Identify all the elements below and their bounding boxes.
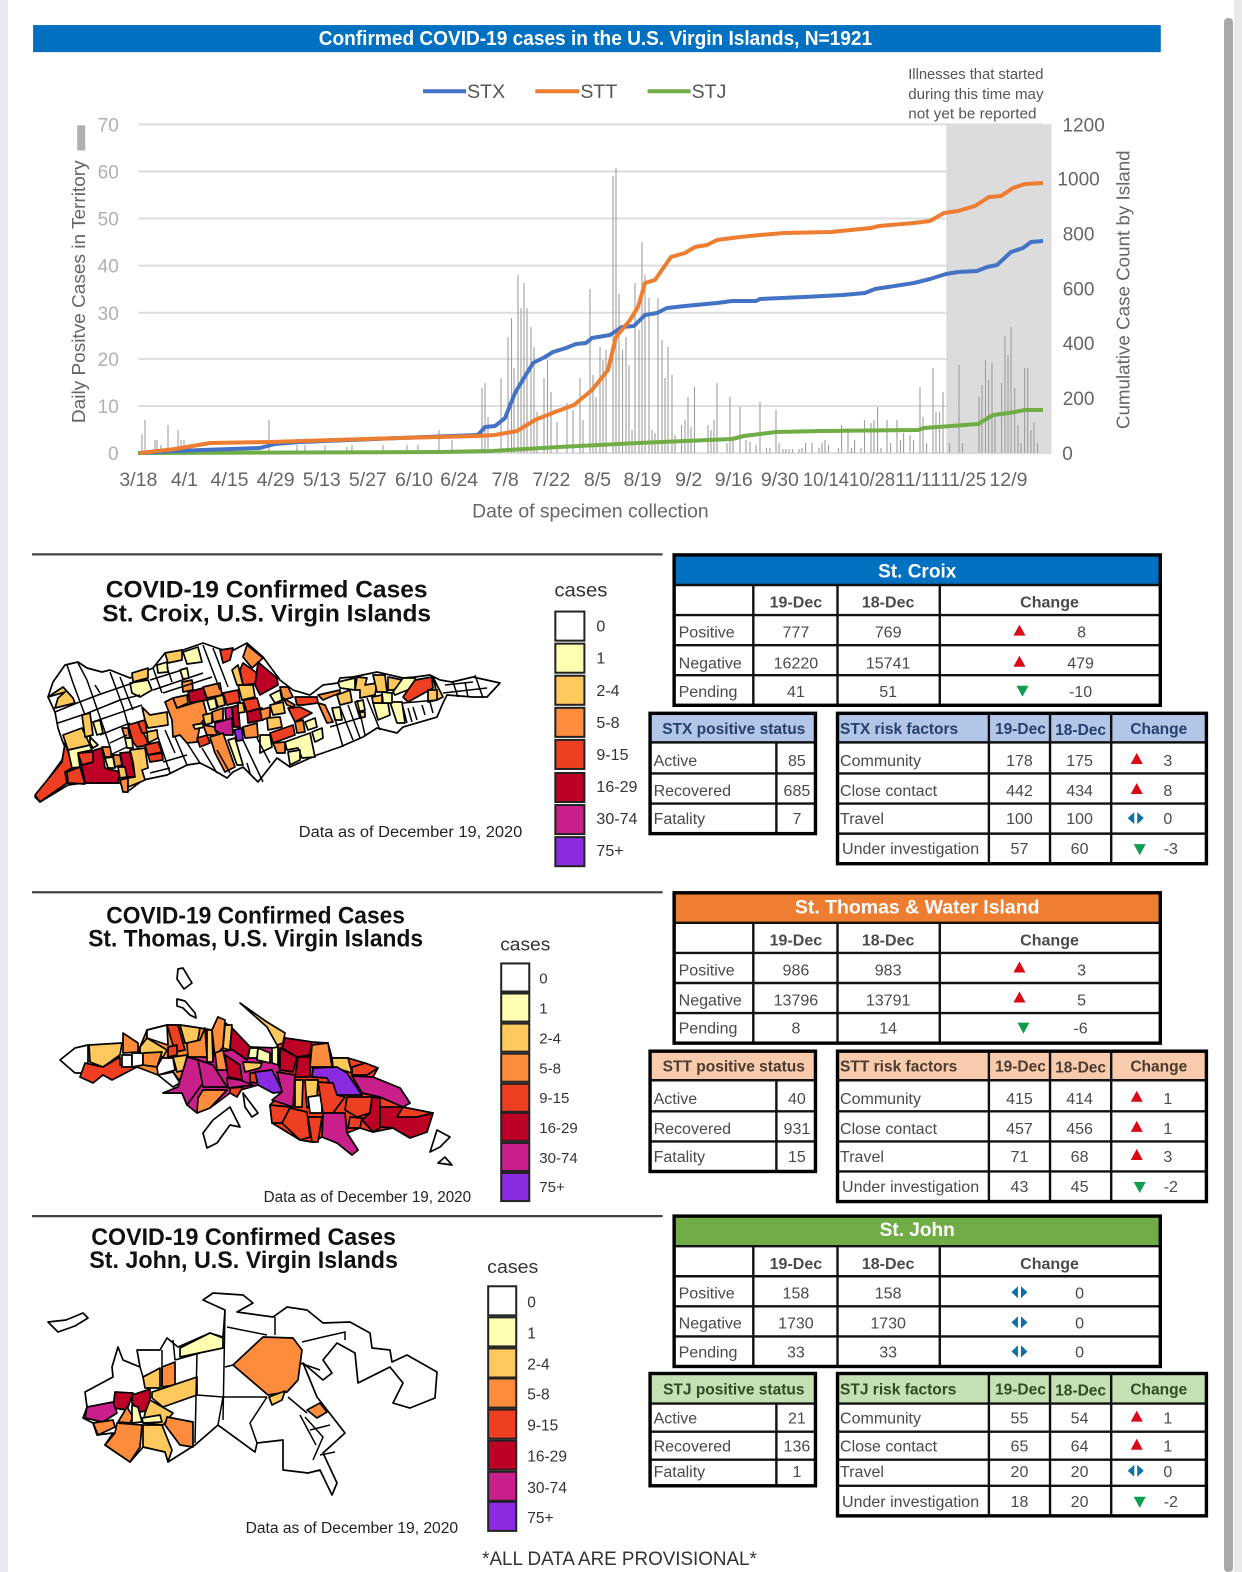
panel: St. John map bbox=[48, 1224, 567, 1537]
left axis labels bbox=[98, 115, 119, 465]
table: STJ risk factors: 65 bbox=[1011, 1438, 1028, 1456]
table: STJ positive status: 1 bbox=[792, 1463, 801, 1481]
legend: St. Thomas case bins: 0 bbox=[539, 971, 548, 988]
heading: St. John map title: St. John, U.S. Virgin Islands bbox=[89, 1247, 398, 1274]
table: STT risk factors: 19-Dec bbox=[995, 1059, 1046, 1076]
table: STT risk factors: STT risk factors bbox=[840, 1059, 957, 1076]
date axis labels: 4/15 bbox=[211, 469, 249, 491]
daily case bars bbox=[142, 168, 1038, 453]
date axis labels: 11/11 bbox=[895, 469, 941, 491]
table: STX risk factors: 100 bbox=[1066, 810, 1093, 828]
right axis labels bbox=[1057, 115, 1105, 465]
right axis labels: 800 bbox=[1063, 225, 1094, 246]
table: STX risk factors: 178 bbox=[1006, 752, 1033, 770]
legend: St. Croix case bins: cases bbox=[554, 581, 607, 602]
table: St. John summary: 158 bbox=[875, 1284, 902, 1302]
table: STT risk factors: 1 bbox=[1163, 1090, 1172, 1108]
table: St. John summary: 33 bbox=[787, 1343, 805, 1361]
table: St. Croix summary: 769 bbox=[875, 624, 902, 642]
table: St. John summary: 0 bbox=[1075, 1343, 1084, 1361]
table: STT risk factors: Under investigation bbox=[842, 1178, 979, 1196]
right axis title: Cumulative Case Count by Island bbox=[1114, 150, 1134, 429]
table: STT risk factors: 43 bbox=[1011, 1178, 1028, 1196]
table: STX risk factors: 19-Dec bbox=[995, 721, 1046, 738]
table: STJ positive status: 136 bbox=[784, 1438, 810, 1456]
legend: St. Croix case bins: 0 bbox=[596, 618, 605, 636]
table: STX positive status: 85 bbox=[788, 752, 806, 770]
table: STX risk factors: Travel bbox=[840, 810, 884, 828]
table: STT positive status: Active bbox=[654, 1090, 697, 1108]
choropleth map: St. John bbox=[48, 1293, 437, 1495]
legend: St. John case bins: 5-8 bbox=[527, 1387, 550, 1404]
table: STT risk factors: -2 bbox=[1164, 1178, 1178, 1196]
heading: St. Thomas map title bbox=[88, 902, 423, 952]
legend: islands: STX bbox=[467, 81, 505, 103]
table: St. Thomas & Water Island summary: 8 bbox=[791, 1020, 800, 1038]
table: St. Croix summary: 15741 bbox=[866, 655, 910, 673]
left axis title: Daily Positve Cases in Territory bbox=[69, 160, 89, 423]
table: St. Croix summary: Positive bbox=[679, 624, 735, 642]
table: STX risk factors: 442 bbox=[1006, 782, 1033, 800]
chart shaded reporting-lag region bbox=[946, 124, 1052, 454]
table: STJ positive status: STJ positive status bbox=[663, 1382, 804, 1399]
left axis labels: 0 bbox=[108, 444, 119, 465]
left axis labels: 30 bbox=[98, 304, 119, 325]
table: STT positive status: Recovered bbox=[654, 1120, 731, 1138]
table: St. Thomas & Water Island summary: 986 bbox=[783, 961, 809, 979]
table: STT risk factors: 415 bbox=[1006, 1090, 1033, 1108]
date axis labels: 9/16 bbox=[715, 469, 753, 491]
table: St. Thomas & Water Island summary: 19-Dec bbox=[770, 931, 822, 949]
table: St. Thomas & Water Island summary: 3 bbox=[1077, 961, 1086, 979]
date axis labels: 6/24 bbox=[440, 469, 478, 491]
table: STT risk factors: Close contact bbox=[840, 1120, 938, 1138]
choropleth map: St. Thomas bbox=[60, 968, 452, 1165]
date axis labels: 11/25 bbox=[940, 469, 987, 491]
table: St. John summary: 1730 bbox=[778, 1314, 814, 1332]
left axis labels: 50 bbox=[98, 210, 119, 231]
right axis labels: 400 bbox=[1063, 334, 1094, 355]
table: STJ risk factors: 18 bbox=[1011, 1493, 1028, 1511]
table: St. Thomas & Water Island summary: St. Thomas & Water Island bbox=[795, 897, 1040, 918]
legend: St. Thomas case bins: 9-15 bbox=[539, 1090, 569, 1107]
legend: St. Croix case bins: 75+ bbox=[596, 842, 624, 860]
table: STX positive status: 685 bbox=[784, 782, 810, 800]
map parcel boundaries bbox=[55, 645, 487, 782]
table: STX risk factors: STX risk factors bbox=[840, 721, 958, 738]
table: STJ risk factors: STJ risk factors bbox=[840, 1382, 956, 1399]
heading: St. Croix map title: St. Croix, U.S. Virgin Islands bbox=[102, 601, 431, 628]
table: STJ risk factors: 0 bbox=[1163, 1463, 1172, 1481]
map parcel boundaries bbox=[140, 1310, 345, 1460]
table: STX risk factors: Under investigation bbox=[842, 840, 979, 858]
table: St. John summary: 18-Dec bbox=[862, 1255, 914, 1273]
date axis labels bbox=[119, 469, 1027, 491]
table: St. Thomas & Water Island summary: 18-Dec bbox=[862, 931, 914, 949]
table: STT risk factors: 68 bbox=[1071, 1148, 1089, 1166]
table: St. Croix summary bbox=[674, 555, 1160, 705]
table: STT risk factors: 71 bbox=[1011, 1148, 1028, 1166]
table: STX risk factors: 100 bbox=[1006, 810, 1033, 828]
table: St. Croix summary: 18-Dec bbox=[862, 594, 914, 612]
table: St. Thomas & Water Island summary: Pending bbox=[679, 1020, 737, 1038]
left axis labels: 40 bbox=[98, 257, 119, 278]
table: St. John summary: Pending bbox=[679, 1343, 737, 1361]
table: STX risk factors: 57 bbox=[1011, 840, 1028, 858]
table: St. John summary: 33 bbox=[879, 1343, 897, 1361]
right axis labels: 1200 bbox=[1062, 115, 1105, 136]
table: St. Croix summary: 19-Dec bbox=[770, 594, 822, 612]
table: STX positive status: 7 bbox=[792, 810, 801, 828]
annotation: reporting lag bbox=[908, 67, 1044, 122]
table: STX risk factors bbox=[838, 713, 1206, 864]
table: STX positive status bbox=[650, 713, 815, 834]
table: STT risk factors: 3 bbox=[1163, 1148, 1172, 1166]
table: St. John summary: Change bbox=[1020, 1255, 1079, 1273]
table: St. Croix summary: Pending bbox=[679, 683, 737, 701]
note: data date: Data as of December 19, 2020 bbox=[299, 823, 522, 841]
table: STJ positive status: 21 bbox=[788, 1410, 806, 1428]
table: STJ risk factors: 20 bbox=[1011, 1463, 1028, 1481]
x axis title: Date of specimen collection bbox=[472, 501, 709, 522]
right axis labels: 0 bbox=[1062, 444, 1073, 465]
table: STT risk factors bbox=[838, 1051, 1206, 1202]
legend: islands: STT bbox=[580, 81, 617, 103]
table: STJ risk factors: Close contact bbox=[840, 1438, 938, 1456]
legend: St. Croix case bins: 1 bbox=[596, 650, 605, 668]
table: STX risk factors: -3 bbox=[1164, 840, 1178, 858]
table: STJ risk factors: Community bbox=[840, 1410, 921, 1428]
date axis labels: 8/19 bbox=[624, 469, 662, 491]
table: St. Croix summary: 51 bbox=[879, 683, 897, 701]
note: data date: Data as of December 19, 2020 bbox=[246, 1519, 458, 1537]
table: St. Thomas & Water Island summary: Positive bbox=[679, 961, 735, 979]
choropleth map: St. Croix bbox=[35, 643, 500, 802]
table: St. Croix summary: Negative bbox=[679, 655, 742, 673]
annotation: reporting lag: not yet be reported bbox=[908, 106, 1037, 122]
legend: St. Thomas case bins bbox=[500, 934, 578, 1201]
table: St. Thomas & Water Island summary: 13796 bbox=[774, 992, 818, 1010]
table: STJ risk factors: 1 bbox=[1163, 1438, 1172, 1456]
date axis labels: 4/1 bbox=[171, 469, 198, 491]
date axis labels: 10/14 bbox=[803, 469, 849, 491]
table: St. John summary: 0 bbox=[1075, 1314, 1084, 1332]
table: STJ risk factors: 20 bbox=[1071, 1463, 1089, 1481]
table: STX positive status: STX positive status bbox=[662, 721, 805, 738]
table: St. Croix summary: 777 bbox=[783, 624, 809, 642]
annotation: reporting lag: during this time may bbox=[908, 87, 1044, 103]
heading: St. John map title: COVID-19 Confirmed Cases bbox=[91, 1224, 396, 1251]
legend: St. John case bins: 1 bbox=[527, 1325, 536, 1342]
table: STJ risk factors: 54 bbox=[1071, 1410, 1089, 1428]
table: STX positive status: Fatality bbox=[654, 810, 705, 828]
heading: St. Thomas map title: COVID-19 Confirmed Cases bbox=[106, 902, 405, 929]
legend: St. Croix case bins: 5-8 bbox=[596, 714, 620, 732]
date axis labels: 3/18 bbox=[119, 469, 157, 491]
right axis labels: 1000 bbox=[1057, 169, 1100, 190]
legend: St. Croix case bins: 30-74 bbox=[596, 810, 637, 828]
table: STT positive status: STT positive status bbox=[663, 1059, 805, 1076]
table: STJ risk factors: Under investigation bbox=[842, 1493, 979, 1511]
footnote: provisional data: *ALL DATA ARE PROVISIONAL* bbox=[482, 1549, 757, 1570]
table: STJ positive status: Fatality bbox=[654, 1463, 705, 1481]
legend: St. Croix case bins: 16-29 bbox=[596, 778, 637, 796]
table: STX risk factors: 3 bbox=[1163, 752, 1172, 770]
table: STT positive status: 40 bbox=[788, 1090, 806, 1108]
table: STJ risk factors: -2 bbox=[1164, 1493, 1178, 1511]
table: STX risk factors: 0 bbox=[1163, 810, 1172, 828]
table: STJ risk factors: Travel bbox=[840, 1463, 884, 1481]
table: St. John summary: Positive bbox=[679, 1284, 735, 1302]
table: St. Croix summary: 8 bbox=[1077, 624, 1086, 642]
panel: St. Croix map bbox=[35, 577, 637, 866]
legend: St. Thomas case bins: 16-29 bbox=[539, 1120, 578, 1137]
heading: St. John map title bbox=[89, 1224, 398, 1274]
left axis labels: 10 bbox=[98, 397, 119, 418]
heading: St. Croix map title: COVID-19 Confirmed Cases bbox=[106, 577, 428, 604]
legend: St. Croix case bins bbox=[554, 581, 637, 866]
table: St. Thomas & Water Island summary: 5 bbox=[1077, 992, 1086, 1010]
legend: St. Thomas case bins: 5-8 bbox=[539, 1061, 561, 1078]
legend: St. Croix case bins: 2-4 bbox=[596, 682, 620, 700]
table: STX risk factors: 434 bbox=[1066, 782, 1093, 800]
note: data date: Data as of December 19, 2020 bbox=[264, 1188, 471, 1206]
heading: St. Croix map title bbox=[102, 577, 431, 628]
table: STJ positive status: Active bbox=[654, 1410, 697, 1428]
legend: St. John case bins: 30-74 bbox=[527, 1480, 567, 1497]
date axis labels: 7/8 bbox=[492, 469, 519, 491]
legend: St. John case bins: cases bbox=[487, 1257, 538, 1277]
table: STT risk factors: 457 bbox=[1006, 1120, 1033, 1138]
legend: St. John case bins: 75+ bbox=[527, 1510, 554, 1527]
right axis labels: 600 bbox=[1063, 280, 1094, 301]
left axis labels: 20 bbox=[98, 350, 119, 371]
table: St. John summary: 158 bbox=[783, 1284, 809, 1302]
date axis labels: 10/28 bbox=[849, 469, 895, 491]
legend: St. Thomas case bins: cases bbox=[500, 934, 550, 954]
table: STX risk factors: 18-Dec bbox=[1055, 722, 1106, 739]
table: STJ risk factors: 18-Dec bbox=[1055, 1383, 1106, 1400]
table: St. Croix summary: -10 bbox=[1069, 683, 1092, 701]
table: St. Thomas & Water Island summary: -6 bbox=[1073, 1020, 1088, 1038]
legend: St. Thomas case bins: 1 bbox=[539, 1001, 548, 1018]
table: STX positive status: Recovered bbox=[654, 782, 731, 800]
table: STT positive status: 15 bbox=[788, 1148, 806, 1166]
legend: St. Thomas case bins: 30-74 bbox=[539, 1150, 578, 1167]
date axis labels: 6/10 bbox=[395, 469, 433, 491]
table: STT risk factors: Change bbox=[1130, 1059, 1188, 1076]
line: STT cumulative bbox=[140, 183, 1043, 453]
table: St. Thomas & Water Island summary: Negative bbox=[679, 992, 742, 1010]
left axis legend bar bbox=[77, 125, 85, 150]
legend: islands bbox=[423, 81, 726, 103]
table: STJ risk factors: 20 bbox=[1071, 1493, 1089, 1511]
table: STJ risk factors: 64 bbox=[1071, 1438, 1089, 1456]
table: STJ risk factors: Change bbox=[1130, 1382, 1188, 1399]
table: STX positive status: Active bbox=[654, 752, 697, 770]
table: STX risk factors: 8 bbox=[1163, 782, 1172, 800]
table: St. Croix summary: St. Croix bbox=[878, 561, 957, 582]
date axis labels: 12/9 bbox=[989, 469, 1027, 491]
table: STX risk factors: Close contact bbox=[840, 782, 938, 800]
table: St. John summary: 1730 bbox=[870, 1314, 906, 1332]
table: St. John summary: 19-Dec bbox=[770, 1255, 822, 1273]
table: STT risk factors: 1 bbox=[1163, 1120, 1172, 1138]
table: STT positive status: 931 bbox=[784, 1120, 810, 1138]
table: St. Croix summary: 479 bbox=[1067, 655, 1094, 673]
date axis labels: 5/27 bbox=[349, 469, 387, 491]
table: St. John summary: St. John bbox=[880, 1220, 955, 1241]
chart gridlines bbox=[138, 124, 1043, 453]
table: STJ risk factors: 55 bbox=[1011, 1410, 1028, 1428]
table: St. Thomas & Water Island summary: 983 bbox=[875, 961, 902, 979]
table: STT risk factors: 414 bbox=[1066, 1090, 1093, 1108]
date axis labels: 9/2 bbox=[675, 469, 702, 491]
table: STT positive status: Fatality bbox=[654, 1148, 705, 1166]
table: STT risk factors: 18-Dec bbox=[1055, 1060, 1106, 1077]
table: St. Thomas & Water Island summary: 13791 bbox=[866, 992, 910, 1010]
line: STJ cumulative bbox=[138, 410, 1043, 453]
table: St. John summary: Negative bbox=[679, 1314, 742, 1332]
date axis labels: 5/13 bbox=[303, 469, 341, 491]
table: St. Thomas & Water Island summary bbox=[674, 893, 1160, 1043]
table: St. John summary bbox=[674, 1216, 1160, 1366]
date axis labels: 7/22 bbox=[532, 469, 570, 491]
table: St. Thomas & Water Island summary: Change bbox=[1020, 931, 1079, 949]
table: STJ risk factors: 1 bbox=[1163, 1410, 1172, 1428]
table: STJ positive status: Recovered bbox=[654, 1438, 731, 1456]
table: St. Croix summary: 41 bbox=[787, 683, 805, 701]
table: STT risk factors: 45 bbox=[1071, 1178, 1089, 1196]
table: St. Croix summary: Change bbox=[1020, 594, 1079, 612]
table: STT risk factors: Community bbox=[840, 1090, 921, 1108]
legend: St. John case bins: 0 bbox=[527, 1294, 536, 1311]
chart: daily and cumulative cases bbox=[69, 67, 1134, 522]
table: STT risk factors: Travel bbox=[840, 1148, 884, 1166]
legend: St. John case bins bbox=[487, 1257, 567, 1531]
table: STX risk factors: Change bbox=[1130, 721, 1188, 738]
legend: St. John case bins: 16-29 bbox=[527, 1449, 567, 1466]
title banner: Confirmed COVID-19 cases in the U.S. Virgin Islands, N=1921 bbox=[319, 28, 872, 50]
table: St. Croix summary: 16220 bbox=[774, 655, 818, 673]
title banner bbox=[33, 25, 1161, 52]
legend: St. John case bins: 9-15 bbox=[527, 1418, 558, 1435]
table: STJ positive status bbox=[650, 1373, 815, 1486]
table: STX risk factors: 60 bbox=[1071, 840, 1089, 858]
date axis labels: 9/30 bbox=[761, 469, 799, 491]
right axis labels: 200 bbox=[1063, 389, 1094, 410]
table: STJ risk factors: 19-Dec bbox=[995, 1382, 1046, 1399]
legend: St. Thomas case bins: 2-4 bbox=[539, 1031, 561, 1048]
date axis labels: 4/29 bbox=[257, 469, 295, 491]
legend: St. John case bins: 2-4 bbox=[527, 1356, 550, 1373]
table: STX risk factors: 175 bbox=[1066, 752, 1093, 770]
date axis labels: 8/5 bbox=[584, 469, 611, 491]
table: STT risk factors: 456 bbox=[1066, 1120, 1093, 1138]
annotation: reporting lag: Illnesses that started bbox=[908, 67, 1044, 83]
table: STX risk factors: Community bbox=[840, 752, 921, 770]
table: St. Thomas & Water Island summary: 14 bbox=[879, 1020, 897, 1038]
left axis labels: 70 bbox=[98, 115, 119, 136]
panel: St. Thomas map bbox=[60, 902, 578, 1206]
heading: St. Thomas map title: St. Thomas, U.S. Virgin Islands bbox=[88, 925, 423, 952]
table: STT positive status bbox=[650, 1051, 815, 1171]
legend: St. Thomas case bins: 75+ bbox=[539, 1179, 565, 1196]
line: STX cumulative bbox=[140, 241, 1043, 453]
table: St. John summary: 0 bbox=[1075, 1284, 1084, 1302]
legend: islands: STJ bbox=[692, 81, 726, 103]
legend: St. Croix case bins: 9-15 bbox=[596, 746, 629, 764]
left axis labels: 60 bbox=[98, 162, 119, 183]
table: STJ risk factors bbox=[838, 1373, 1206, 1516]
